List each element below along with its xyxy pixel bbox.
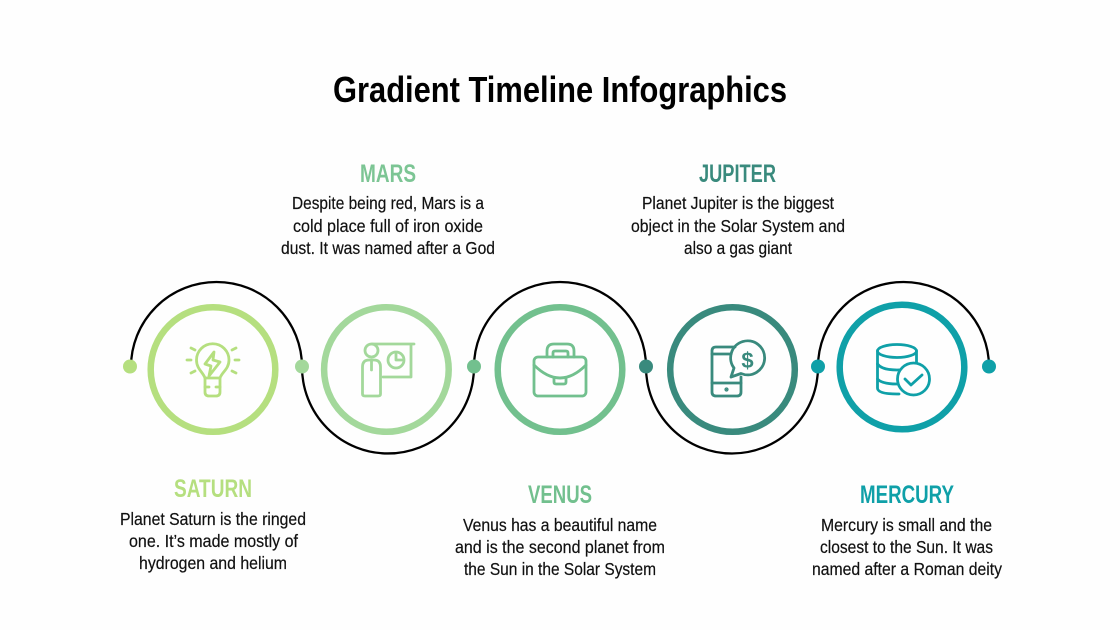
saturn heading: SATURN — [174, 475, 252, 503]
saturn text: one. It’s made mostly of — [129, 531, 298, 551]
mars text — [281, 193, 495, 258]
panel: Mercury — [812, 305, 1002, 579]
mercury text: Mercury is small and the — [821, 515, 992, 535]
jupiter text: Planet Jupiter is the biggest — [642, 193, 834, 213]
mars text: cold place full of iron oxide — [293, 216, 483, 236]
mercury text — [812, 515, 1002, 579]
venus text: Venus has a beautiful name — [463, 515, 657, 535]
icon: database with check — [878, 344, 930, 395]
panel: Jupiter — [631, 160, 845, 432]
panel: Saturn — [120, 307, 306, 573]
venus ring — [498, 307, 622, 432]
panel: Mars — [281, 160, 495, 432]
jupiter text — [631, 193, 845, 258]
mercury text: closest to the Sun. It was — [820, 537, 993, 557]
mars text: Despite being red, Mars is a — [292, 193, 484, 213]
icon: presenter — [362, 344, 414, 396]
icon: phone with dollar bubble — [712, 341, 765, 396]
venus text: the Sun in the Solar System — [464, 559, 656, 579]
saturn text — [120, 509, 306, 573]
mercury heading: MERCURY — [860, 481, 954, 509]
timeline connector line — [131, 282, 989, 454]
mars text: dust. It was named after a God — [281, 238, 495, 258]
icon: phone with dollar bubble: $ — [741, 348, 754, 373]
mars ring — [324, 307, 449, 432]
venus heading: VENUS — [528, 481, 592, 509]
timeline dots — [123, 360, 996, 374]
panel: Venus — [455, 307, 665, 579]
mercury text: named after a Roman deity — [812, 559, 1002, 579]
saturn text: hydrogen and helium — [139, 553, 287, 573]
jupiter ring — [670, 307, 795, 432]
mercury ring — [840, 305, 964, 429]
venus text — [455, 515, 665, 579]
saturn text: Planet Saturn is the ringed — [120, 509, 306, 529]
jupiter heading: JUPITER — [699, 160, 776, 188]
mars heading: MARS — [360, 160, 416, 188]
jupiter text: object in the Solar System and — [631, 216, 845, 236]
venus text: and is the second planet from — [455, 537, 665, 557]
saturn ring — [151, 307, 275, 432]
title: Gradient Timeline Infographics — [333, 69, 787, 110]
icon: light bulb — [187, 344, 239, 396]
jupiter text: also a gas giant — [684, 238, 792, 258]
icon: briefcase — [534, 344, 586, 396]
